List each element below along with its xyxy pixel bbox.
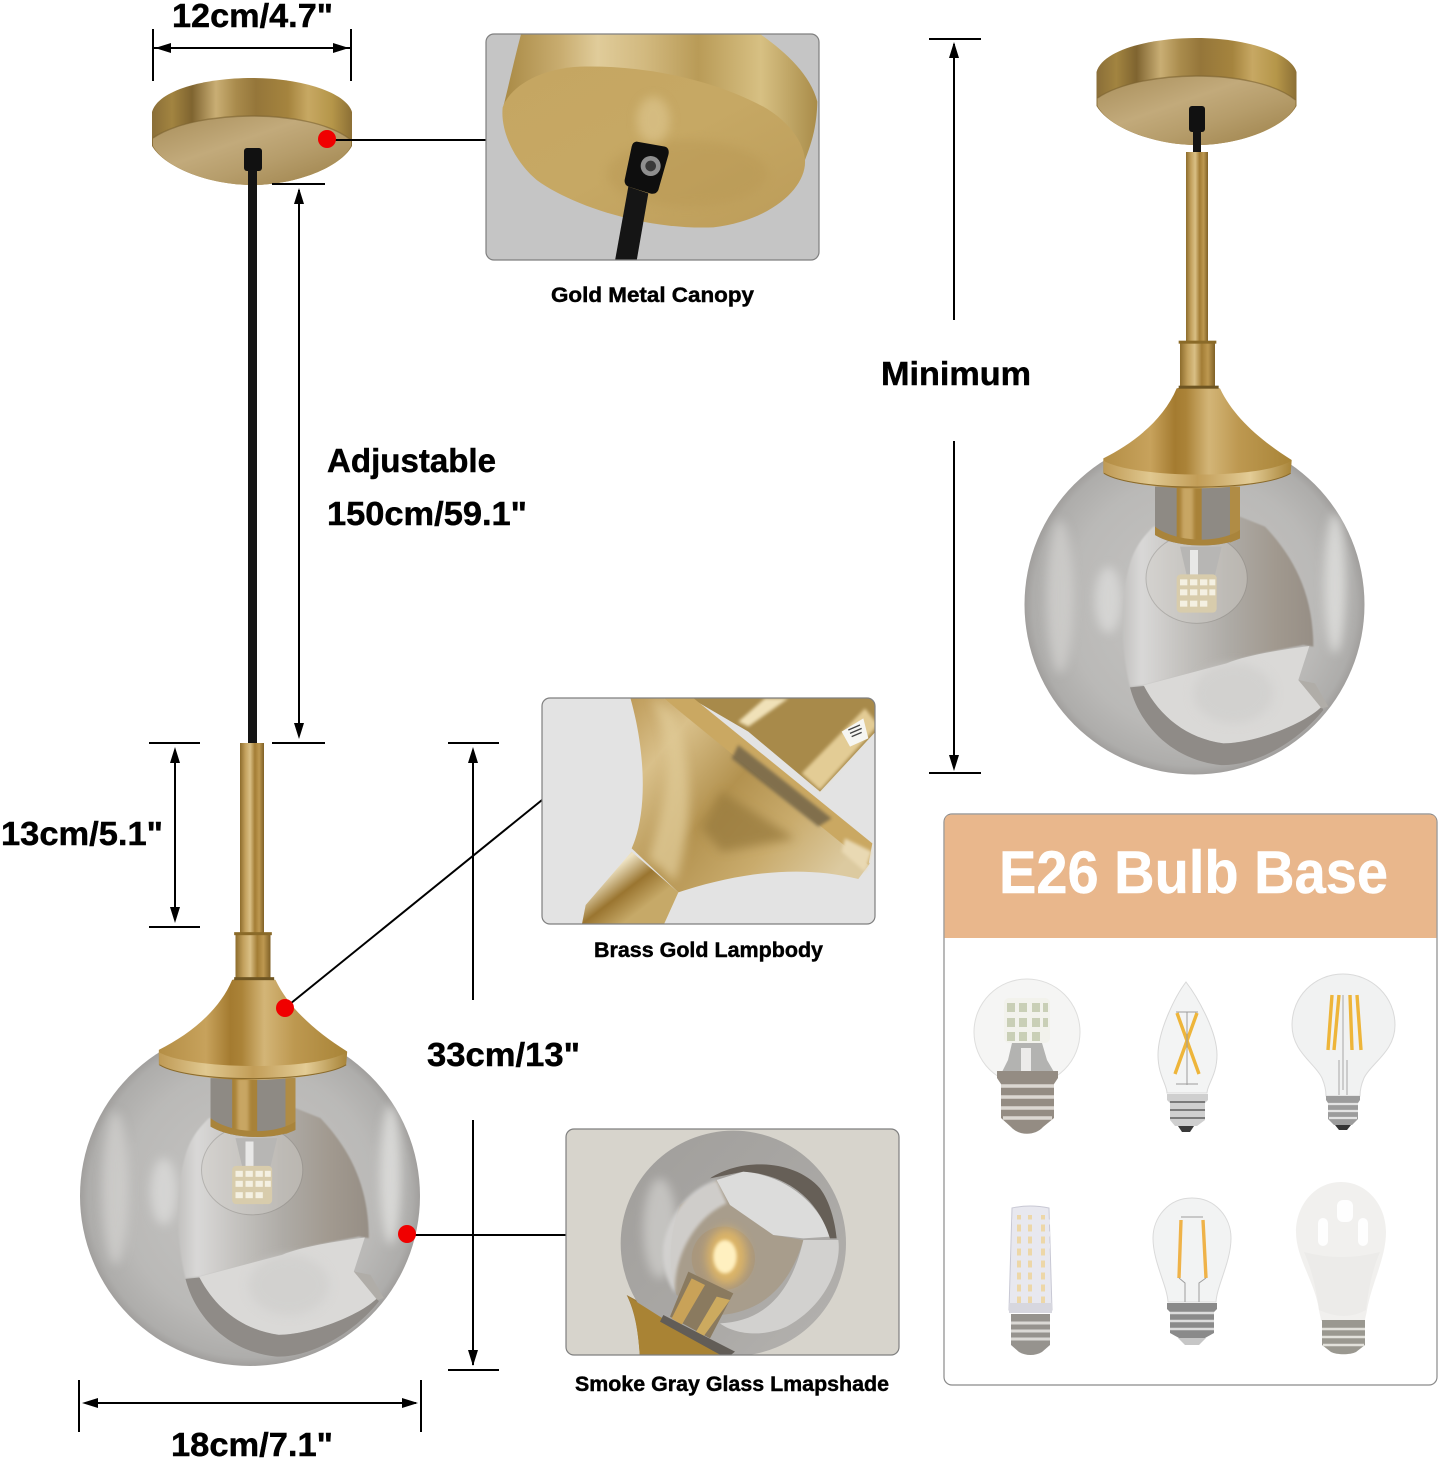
dimension: lamp height 33cm — [427, 743, 580, 1370]
left lamp: full pendant with cord — [80, 78, 420, 1366]
canopy: ceiling plate — [1096, 38, 1296, 152]
dimension: stem 13cm: 13cm/5.1" — [1, 815, 163, 852]
caption: brass gold lampbody: Brass Gold Lampbody — [594, 939, 823, 962]
label: adjustable 150cm — [327, 442, 527, 532]
stem rod — [240, 743, 264, 933]
panel: smoke gray glass lampshade photo — [566, 1129, 899, 1358]
icon: globe filament bulb — [1292, 974, 1395, 1130]
icon: LED corn bulb — [1009, 1206, 1052, 1355]
dimension: adjustable cord length — [272, 184, 325, 743]
lamp body and smoke glass globe — [80, 932, 420, 1366]
dimension: minimum height: Minimum — [881, 355, 1031, 392]
right lamp: minimum height version — [1024, 38, 1364, 774]
dimension: minimum height — [881, 39, 1031, 773]
panel: gold metal canopy photo — [486, 32, 819, 261]
icon: candle filament bulb — [1158, 982, 1217, 1132]
callout: canopy marker and leader line — [318, 130, 486, 148]
panel: brass gold lampbody photo — [542, 697, 882, 926]
caption: gold metal canopy: Gold Metal Canopy — [551, 284, 754, 307]
stem rod — [1186, 152, 1208, 344]
caption: smoke gray glass lampshade: Smoke Gray Glass Lmapshade — [575, 1373, 889, 1396]
dimension: canopy width 12cm — [153, 0, 351, 81]
panel heading: E26 Bulb Base — [999, 839, 1388, 906]
icon: S14 filament bulb — [1153, 1198, 1231, 1345]
callout: glass marker and leader line — [398, 1225, 566, 1243]
icon: LED globe bulb — [974, 979, 1080, 1134]
dimension: globe diameter 18cm — [79, 1380, 421, 1463]
dimension: stem 13cm — [1, 743, 200, 927]
icon: A19 frosted bulb — [1296, 1182, 1386, 1354]
dimension: lamp height 33cm: 33cm/13" — [427, 1036, 580, 1073]
panel header band — [945, 815, 1436, 938]
label: adjustable 150cm: 150cm/59.1" — [327, 495, 527, 532]
canopy: ceiling plate — [152, 78, 352, 185]
callout: lampbody marker and leader line — [276, 800, 542, 1017]
label: adjustable 150cm: Adjustable — [327, 442, 496, 479]
lamp body and smoke glass globe — [1024, 341, 1364, 774]
cord — [248, 170, 257, 744]
panel: E26 bulb base compatibility — [944, 814, 1437, 1385]
dimension: globe diameter 18cm: 18cm/7.1" — [171, 1426, 333, 1463]
